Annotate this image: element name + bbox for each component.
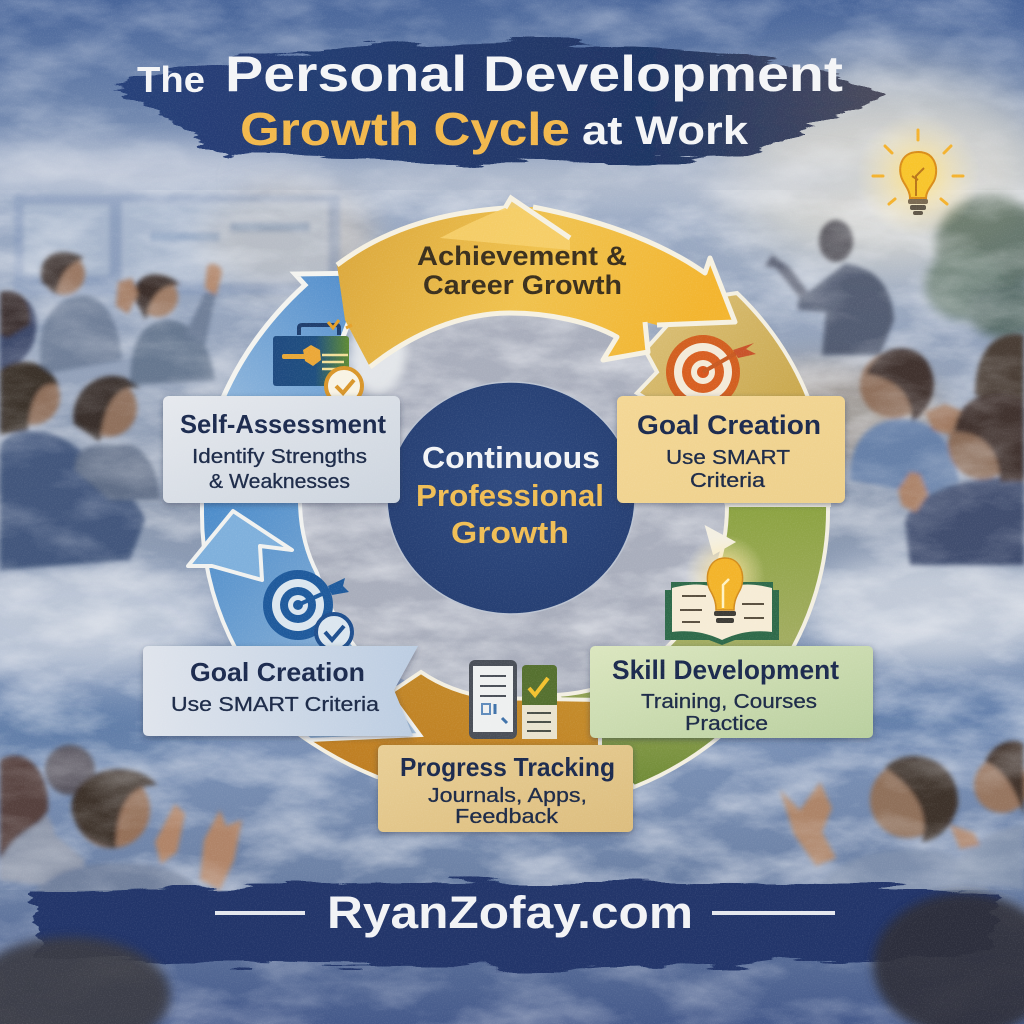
card: self-assessment: Self-Assessment — [180, 409, 386, 439]
center circle — [387, 382, 635, 614]
label: achievement and career growth: Career Growth — [423, 270, 622, 300]
growth cycle ring — [188, 198, 829, 794]
arrow: yellow top edge highlights — [337, 207, 735, 367]
card: progress tracking: Journals, Apps, — [428, 785, 587, 807]
card: goal creation left — [143, 646, 418, 736]
card: goal creation right: Use SMART — [666, 447, 790, 469]
icon: glowing light bulb — [856, 113, 980, 237]
audience: bottom right group — [780, 741, 1024, 895]
arrow: notch edge — [505, 198, 570, 238]
icon: phone and tracker — [469, 660, 557, 739]
label: achievement and career growth: Achievement & — [417, 241, 627, 271]
card: self-assessment: & Weaknesses — [209, 471, 350, 493]
card: goal creation left: Use SMART Criteria — [171, 694, 380, 716]
soft fog over scene — [0, 190, 1024, 890]
card: skill development — [590, 646, 873, 738]
card: skill development: Practice — [685, 713, 768, 735]
arrow: small white tip pointing down — [707, 528, 733, 553]
segment: blue band left — [202, 500, 420, 740]
title: The — [137, 59, 205, 100]
card: goal creation right: Goal Creation — [637, 410, 821, 440]
title — [137, 46, 843, 155]
office board in background — [14, 195, 340, 295]
card: progress tracking: Feedback — [455, 806, 559, 828]
segment: blue upper left — [222, 273, 367, 400]
center circle: Continuous — [422, 440, 600, 475]
audience: bottom left group — [0, 745, 242, 900]
bottom dark crowd foreground — [0, 893, 1024, 1024]
card: goal creation right: Criteria — [690, 470, 766, 492]
footer website text: RyanZofay.com — [327, 887, 693, 938]
title brush banner — [110, 42, 884, 162]
card: progress tracking — [378, 745, 633, 832]
label: achievement and career growth — [417, 241, 627, 300]
card: skill development: Skill Development — [612, 655, 839, 685]
title: Personal Development — [225, 46, 843, 102]
segment: green right — [557, 505, 828, 787]
card: progress tracking: Progress Tracking — [400, 752, 615, 782]
center circle: Professional — [416, 478, 604, 513]
ring inner cloudy band — [302, 316, 725, 697]
arrow: blue lower head — [188, 511, 292, 580]
icon: blue target with check — [263, 570, 352, 650]
icon: briefcase — [273, 320, 362, 404]
icon: orange target — [666, 335, 756, 409]
segment: orange bottom — [300, 672, 600, 794]
title: at Work — [582, 109, 749, 153]
speaker silhouette — [765, 220, 894, 355]
segment: yellow arrow body — [337, 207, 735, 367]
footer website text — [215, 887, 835, 938]
footer banner — [30, 883, 1000, 967]
audience: right group — [850, 334, 1024, 565]
card: self-assessment — [163, 396, 400, 503]
center circle: Growth — [451, 515, 569, 550]
card: self-assessment: Identify Strengths — [192, 446, 367, 468]
card: goal creation left: Goal Creation — [190, 657, 365, 687]
audience: left group — [0, 252, 222, 570]
segment: gold upper right — [637, 293, 829, 505]
title: Growth Cycle — [240, 103, 570, 155]
card: skill development: Training, Courses — [641, 691, 817, 713]
soft glow behind briefcase — [350, 315, 406, 395]
card: goal creation right — [617, 396, 845, 503]
arrow: small top notch — [440, 198, 570, 250]
tree in background — [925, 195, 1024, 338]
icon: book and light bulb — [665, 535, 779, 645]
